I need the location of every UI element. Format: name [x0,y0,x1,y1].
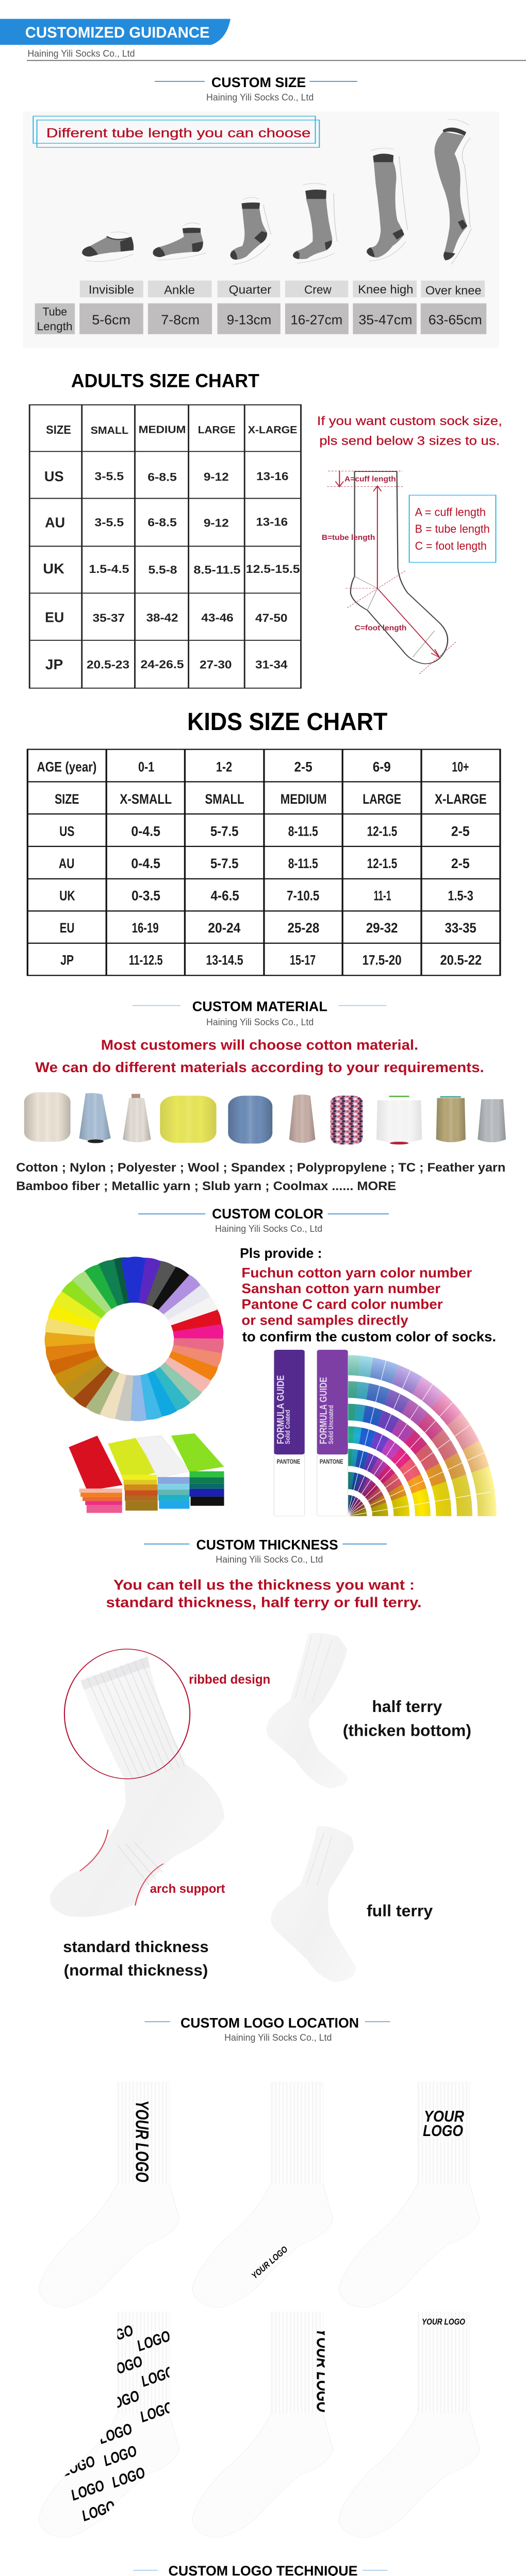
text: color instructions: Pls provide : [240,1246,322,1261]
table: tube lengths [35,303,486,334]
heading: custom logo location: CUSTOM LOGO LOCATION [180,2015,359,2031]
table: adults sizes: 9-12 [204,470,229,483]
heading: adults size chart: ADULTS SIZE CHART [71,370,259,391]
image: sock with large front logo [339,2082,480,2308]
text: full terry: full terry [367,1902,433,1920]
label: large front logo: YOUR [424,2107,465,2125]
text: material intro [35,1037,484,1075]
table: kids sizes: 25-28 [287,921,319,936]
table: kids sizes: AGE (year) [37,759,96,775]
table: kids sizes: 33-35 [445,921,476,936]
table: adults sizes: 1.5-4.5 [89,563,129,575]
image: sock with long tube logo [39,2082,179,2308]
table: kids sizes: MEDIUM [281,792,327,807]
table: adults sizes: 24-26.5 [141,658,184,671]
icon: invisible sock [82,232,134,262]
label: all-over logo pattern: LOGO [107,2353,145,2380]
table: kids sizes: X-SMALL [120,792,172,807]
image: pantone formula guides: Solid Coated [285,1410,292,1444]
callout: measurement legend: A = cuff length [415,505,486,518]
panel: tube length chart [23,112,499,348]
label: cuff logo: YOUR LOGO [422,2317,465,2327]
diagram: sock measurement [322,470,456,674]
heading: custom material: Haining Yili Socks Co., Ltd [206,1016,314,1027]
image: pantone formula guides: PANTONE [320,1459,343,1465]
table: kids sizes: 11-12.5 [129,953,162,968]
section: adults size chart [29,370,502,688]
table: tube lengths: 16-27cm [290,312,342,327]
table: adults sizes: 47-50 [255,612,287,624]
table: kids sizes: 20-24 [208,921,241,936]
table: tube lengths: 35-47cm [358,312,412,327]
heading: custom thickness [144,1537,387,1565]
text: color instructions [240,1246,496,1345]
image: sock with long tube logo: YOUR LOGO [132,2100,152,2182]
text: half terry: (thicken bottom) [343,1722,471,1740]
callout: measurement legend: B = tube length [415,522,490,535]
label: all-over logo pattern: LOGO [60,2453,97,2480]
table: adults sizes: 31-34 [255,658,288,671]
table: tube lengths: Tube [43,305,67,318]
heading: custom logo location [144,2015,390,2043]
sock stack: yellow [108,1438,158,1511]
heading: kids size chart: KIDS SIZE CHART [187,707,387,735]
image: pantone formula guides: PANTONE [277,1459,300,1465]
sock stack: red [69,1436,122,1513]
sock stack: green [171,1433,224,1506]
colour fan [347,1355,497,1516]
label: all-over logo pattern: LOGO [69,2477,107,2504]
table: kids sizes: 4-6.5 [211,888,239,904]
table: sock types: Quarter [229,283,272,297]
table: kids sizes: X-LARGE [435,792,487,807]
label: foot logo: YOUR LOGO [250,2244,290,2281]
icon: knee high sock [367,148,407,261]
table: adults sizes: SIZE [46,423,71,437]
table: kids sizes: 5-7.5 [210,856,239,871]
table: adults sizes: 20.5-23 [87,658,129,671]
table: adults sizes: SMALL [91,425,128,436]
banner: customized guidance [0,19,231,45]
table: adults sizes: UK [43,561,64,577]
table: kids sizes: 0-4.5 [131,824,160,839]
heading: custom material: CUSTOM MATERIAL [192,999,327,1014]
table: adults sizes: 6-8.5 [147,516,177,529]
table: adults sizes: EU [45,610,64,625]
image: pantone formula guides: FORMULA GUIDE [275,1375,286,1444]
table: kids sizes: JP [60,953,74,968]
table: kids sizes: 6-9 [373,759,391,775]
callout: ribbed design: ribbed design [189,1672,270,1686]
table: kids sizes: SMALL [205,792,244,807]
table: sock types [80,281,485,297]
text: standard thickness: (normal thickness) [64,1962,208,1979]
table: adults sizes: LARGE [198,424,236,436]
table: kids sizes: EU [60,921,74,936]
label: all-over logo pattern: LOGO [104,2387,142,2415]
image: sock with side logo [192,2312,333,2537]
table: kids sizes [27,749,500,975]
table: adults sizes: JP [45,657,63,672]
diagram: sock measurement: C=foot length [355,624,406,632]
section: customized guidance and custom size [0,19,526,348]
table: adults sizes: AU [45,515,65,531]
heading: custom thickness: Haining Yili Socks Co., Ltd [216,1554,323,1565]
table: tube lengths: 7-8cm [161,312,200,327]
image: pantone formula guides: Solid Uncoated [327,1405,335,1444]
text: standard thickness [63,1938,209,1979]
table: kids sizes: 0-3.5 [132,888,160,904]
diagram: sock measurement: B=tube length [322,533,375,541]
text: color instructions: or send samples directly [241,1313,408,1328]
image: sock with all-over logo [39,2312,179,2537]
table: kids sizes: 20.5-22 [440,953,482,968]
table: sock types: Knee high [358,283,413,296]
image: pantone formula guides: FORMULA GUIDE [318,1377,329,1444]
table: tube lengths: 63-65cm [429,312,482,327]
table: kids sizes: LARGE [363,792,401,807]
text: thickness intro: standard thickness, half terry or full terry. [106,1595,422,1611]
table: sock types: Ankle [164,283,195,297]
table: kids sizes: 0-4.5 [131,856,160,871]
table: kids sizes: US [59,824,74,839]
table: adults sizes: 3-5.5 [94,470,124,483]
section: materials and custom color [16,1092,506,1516]
label: all-over logo pattern [64,2326,169,2521]
table: kids sizes: 5-7.5 [210,824,239,839]
table: kids sizes: 1.5-3 [448,888,473,904]
table: kids sizes: SIZE [55,792,79,807]
image: pantone formula guides [274,1350,497,1516]
table: adults sizes: MEDIUM [139,424,186,435]
table: adults sizes [29,405,301,688]
label: all-over logo pattern: LOGO [97,2420,135,2448]
label: all-over logo pattern: LOGO [139,2363,177,2391]
table: adults sizes: US [44,469,64,484]
banner: customized guidance: CUSTOMIZED GUIDANCE [25,24,210,41]
table: kids sizes: 15-17 [290,953,316,968]
table: adults sizes: 38-42 [146,612,178,624]
callout: measurement legend: C = foot length [415,539,487,552]
table: kids sizes: 12-1.5 [367,824,397,839]
table: kids sizes: 13-14.5 [206,953,243,968]
diagram: sock measurement: A=cuff length [344,475,396,483]
icon: ankle sock [153,223,206,260]
table: kids sizes: 8-11.5 [288,856,318,871]
image: yarn spools [24,1092,506,1144]
table: sock types: Invisible [89,283,134,297]
text: color instructions: Pantone C card color number [241,1297,443,1312]
image: sock with side logo: YOUR LOGO [313,2328,333,2412]
table: kids sizes: 12-1.5 [367,856,397,871]
table: kids sizes: 2-5 [451,856,470,871]
text: half terry [343,1698,471,1740]
label: all-over logo pattern: LOGO [102,2443,139,2470]
table: kids sizes: 29-32 [366,921,398,936]
image: standard thickness sock [50,1656,225,1917]
sock stack: white [138,1436,190,1509]
label: all-over logo pattern: LOGO [135,2328,173,2355]
text: color instructions: Sanshan cotton yarn number [241,1281,440,1296]
label: large front logo [423,2107,465,2140]
section: logo location socks [39,2082,480,2537]
table: kids sizes: UK [59,888,75,904]
label: large front logo: LOGO [423,2122,463,2140]
text: thickness intro [106,1578,422,1611]
table: kids sizes: AU [59,856,74,871]
table: tube lengths: 9-13cm [227,312,271,327]
heading: custom logo location: Haining Yili Socks Co., Ltd [224,2032,332,2043]
heading: custom thickness: CUSTOM THICKNESS [196,1537,338,1553]
section: kids size chart and custom material heading [27,707,500,1075]
table: kids sizes: 16-19 [132,921,159,936]
heading: custom color [138,1207,389,1234]
table: adults sizes: 27-30 [200,658,232,671]
table: tube lengths: Length [37,320,73,333]
table: kids sizes: 10+ [452,759,469,775]
table: kids sizes: 8-11.5 [288,824,318,839]
table: adults sizes: 8.5-11.5 [193,563,240,576]
table: adults sizes: 43-46 [201,612,234,624]
label: all-over logo pattern: LOGO [110,2464,147,2492]
image: half terry sock [267,1633,348,1788]
text: half terry: half terry [372,1698,442,1716]
text: custom sock size note [317,414,502,448]
heading: custom size [155,75,357,103]
image: full terry sock [271,1826,356,1982]
callout: different tube length [33,116,319,147]
table: adults sizes: 9-12 [204,516,229,529]
table: kids sizes: 17.5-20 [363,953,402,968]
heading: custom color: CUSTOM COLOR [212,1207,323,1222]
callout: different tube length: Different tube length you can choose [46,126,310,140]
table: sock types: Over knee [425,284,481,297]
image: sock with foot logo [192,2082,333,2308]
table: adults sizes: 5.5-8 [149,563,177,576]
label: all-over logo pattern: LOGO [98,2322,136,2349]
text: thickness intro: You can tell us the thickness you want : [113,1578,415,1593]
text: standard thickness: standard thickness [63,1938,209,1956]
text: material intro: Most customers will choose cotton material. [101,1037,418,1053]
heading: custom material [133,999,386,1027]
image: sock with cuff logo [339,2312,480,2537]
table: tube lengths: 5-6cm [92,312,130,327]
heading: custom color: Haining Yili Socks Co., Ltd [215,1223,322,1234]
table: sock types: Crew [304,283,332,297]
table: adults sizes: 12.5-15.5 [246,563,300,575]
table: adults sizes: 13-16 [256,516,288,528]
label: all-over logo pattern: LOGO [80,2498,118,2525]
table: kids sizes: 1-2 [216,759,232,775]
table: kids sizes: 11-1 [374,888,391,904]
icon: crew sock [293,183,337,263]
table: kids sizes: 0-1 [138,759,154,775]
table: kids sizes: 2-5 [451,824,470,839]
callout: arch support: arch support [150,1882,225,1896]
company line under banner: Haining Yili Socks Co., Ltd [27,48,135,59]
table: adults sizes: X-LARGE [248,424,297,436]
label: all-over logo pattern: LOGO [138,2399,176,2426]
icon: quarter sock [230,197,271,264]
callout: ribbed design [64,1649,270,1779]
table: kids sizes: 7-10.5 [287,888,319,904]
table: adults sizes: 3-5.5 [94,516,124,529]
image: sock colour wheel [44,1256,224,1422]
callout: arch support [80,1829,225,1906]
callout: measurement legend [409,495,496,562]
table: adults sizes: 6-8.5 [147,470,177,483]
table: adults sizes: 13-16 [256,470,288,483]
text: material list [16,1161,505,1193]
heading: custom size: Haining Yili Socks Co., Ltd [206,92,314,103]
table: kids sizes: 2-5 [294,759,313,775]
heading: custom size: CUSTOM SIZE [211,75,306,91]
table: adults sizes: 35-37 [93,612,125,624]
section: custom thickness [50,1537,471,1982]
image: stacked colored socks [69,1433,224,1513]
icon: over knee sock [434,120,471,264]
